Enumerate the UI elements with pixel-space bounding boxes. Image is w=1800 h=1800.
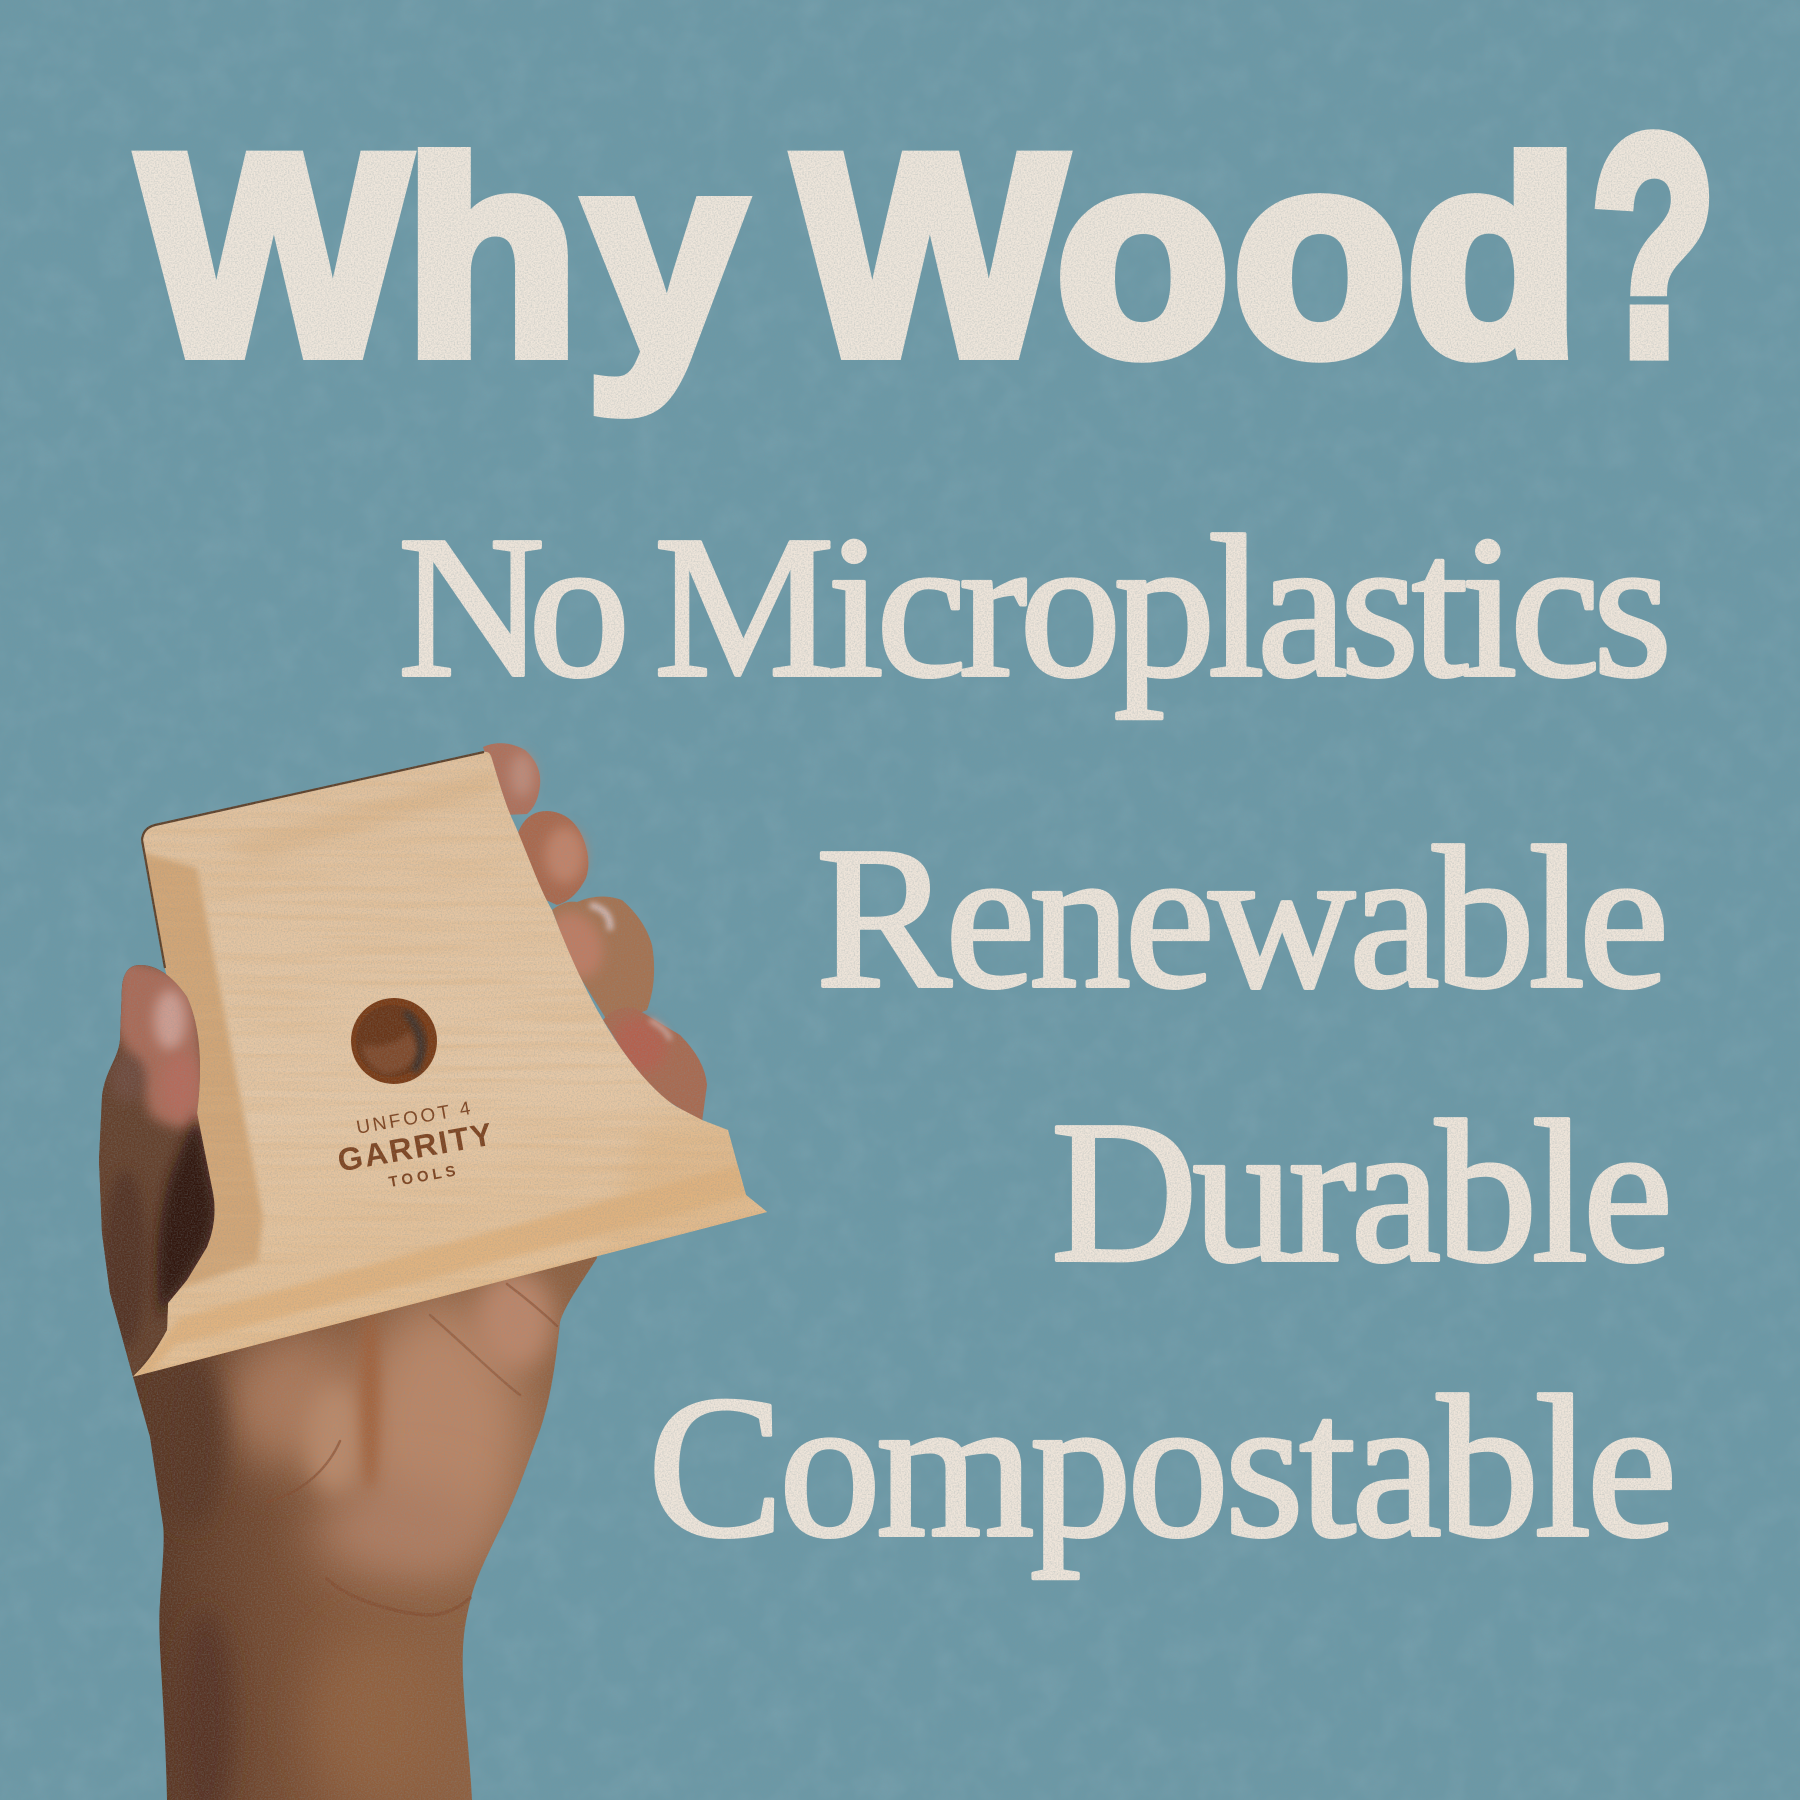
palm creases [267,1284,557,1615]
title: o [1233,97,1406,414]
benefit: No Microplastics: Microplastics [654,494,1672,719]
benefit: Compostable: Compostable [648,1354,1677,1579]
title: d [1406,97,1579,414]
benefit: No Microplastics: No [398,494,630,719]
benefit: Durable: Durable [1051,1079,1673,1304]
fingers [483,743,707,1122]
engraved logo: UNFOOT 4 [355,1098,475,1139]
title: W [796,97,1067,414]
title: o [1056,97,1229,414]
hand and wrist [99,965,600,1800]
engraved logo [331,1095,500,1199]
benefit: Renewable: Renewable [816,805,1669,1030]
icon: hand holding wooden tool [90,740,780,1800]
title: y [586,97,823,415]
wooden scraper tool [120,740,780,1390]
thumb [99,965,215,1377]
title: h [405,97,578,414]
hole in the tool [351,998,437,1084]
engraved logo: GARRITY [335,1116,497,1178]
title: ? [1591,73,1716,419]
title [131,129,1710,419]
title: W [140,97,411,414]
engraved logo: TOOLS [387,1162,461,1191]
